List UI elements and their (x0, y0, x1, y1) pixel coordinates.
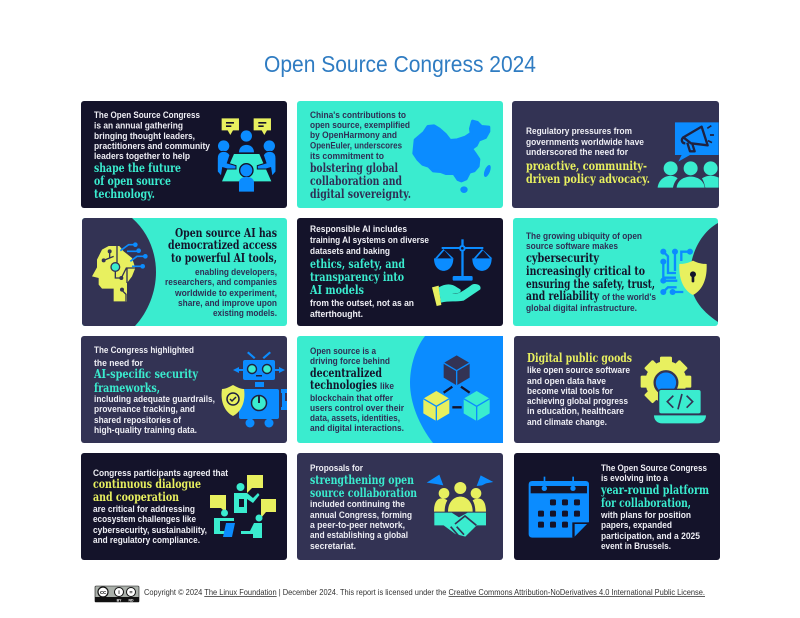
body text: data, assets, identities, (310, 413, 400, 424)
highlight heading: transparency into (310, 269, 404, 284)
highlight heading (93, 366, 199, 395)
highlight heading: continuous dialogue (93, 476, 201, 491)
body text (310, 499, 412, 552)
body text: papers, expanded (601, 520, 672, 531)
body text: become vital tools for (527, 386, 613, 397)
highlight heading: ethics, safety, and (310, 256, 405, 271)
body text (94, 394, 215, 436)
body text: and regulatory compliance. (93, 535, 200, 546)
body text: are critical for addressing (93, 504, 195, 515)
footer: license badge: = (129, 590, 133, 596)
highlight heading: ensuring the safety, trust, (526, 276, 655, 291)
curved dark panel (82, 218, 156, 326)
icon: people around a table (217, 118, 276, 192)
intro text: China's contributions to (310, 110, 406, 121)
body text: afterthought. (310, 309, 363, 320)
highlight heading: proactive, community- (526, 158, 647, 173)
body text: in education, healthcare (527, 406, 624, 417)
panel: cybersecurity (513, 218, 718, 326)
intro text: Responsible AI includes (310, 224, 407, 235)
panel: responsible AI (297, 218, 503, 326)
intro text: The Congress highlighted (94, 345, 194, 356)
body text (310, 381, 404, 434)
body text: like open source software (527, 365, 630, 376)
highlight heading: shape the future (94, 160, 181, 175)
footer: license badge: i (118, 590, 120, 596)
intro text: datasets and baking (310, 246, 390, 257)
panel: strengthening collaboration (297, 453, 503, 560)
heading: to powerful AI tools, (171, 250, 277, 265)
icon: calendar (529, 477, 589, 538)
intro text: governments worldwide have (526, 137, 644, 148)
body text: existing models. (213, 308, 277, 319)
panel: open source AI (82, 218, 287, 326)
body text: including adequate guardrails, (94, 394, 215, 405)
highlight heading: AI-specific security (93, 366, 199, 381)
intro text (526, 126, 644, 158)
body text: enabling developers, (195, 267, 277, 278)
icon: gear and laptop (641, 357, 706, 423)
footer: license badge: ND (128, 598, 134, 602)
highlight heading: of open source (94, 173, 171, 188)
panel: year-round platform (514, 453, 720, 560)
highlight heading (310, 365, 382, 392)
intro text: Open source is a (310, 346, 377, 357)
highlight heading: and reliability (526, 288, 600, 303)
heading: democratized access (168, 237, 277, 252)
body text: like (380, 381, 394, 392)
intro text: Congress participants agreed that (93, 468, 229, 479)
curved dark panel (690, 223, 718, 322)
intro text: bringing thought leaders, (94, 131, 195, 142)
highlight heading: digital sovereignty. (310, 186, 411, 201)
body text: high-quality training data. (94, 425, 197, 436)
body text: of the world's (602, 292, 656, 303)
body text: included continuing the (310, 499, 405, 510)
footer: license badge (95, 586, 139, 602)
highlight heading: and cooperation (93, 489, 179, 504)
intro text (310, 224, 429, 257)
highlight heading (93, 476, 201, 504)
intro text (310, 110, 410, 162)
highlight heading: decentralized (310, 365, 382, 380)
icon: circuit shield (660, 249, 707, 295)
body text: users control over their (310, 403, 404, 414)
body text: event in Brussels. (601, 541, 671, 552)
highlight heading: collaboration and (310, 173, 402, 188)
panel: AI-specific security (81, 336, 287, 443)
panel: dialogue and cooperation (81, 453, 287, 560)
body text: global digital infrastructure. (526, 303, 637, 314)
highlight heading (94, 160, 181, 201)
highlight heading (526, 158, 650, 186)
intro text: Proposals for (310, 463, 363, 474)
highlight heading: Digital public goods (527, 350, 632, 365)
highlight heading: technology. (94, 186, 155, 201)
body text: shared repositories of (94, 415, 182, 426)
highlight heading: driven policy advocacy. (526, 171, 650, 186)
intro text: The growing ubiquity of open (526, 231, 642, 242)
highlight heading: bolstering global (310, 160, 398, 175)
intro text: underscored the need for (526, 147, 628, 158)
body text: from the outset, not as an (310, 298, 414, 309)
highlight heading: increasingly critical to (526, 263, 645, 278)
intro text: The Open Source Congress (94, 110, 200, 121)
intro text: its commitment to (310, 151, 384, 162)
icon: megaphone and audience (658, 122, 719, 188)
icon: robot with shield (222, 352, 287, 428)
footer: license badge: BY (117, 598, 122, 602)
body text: a peer-to-peer network, (310, 520, 405, 531)
icon: AI head (92, 242, 148, 301)
highlight heading (309, 256, 405, 297)
icon: handshake with flags (427, 475, 493, 538)
intro text: open source, exemplified (310, 120, 410, 131)
panel: regulatory pressures (512, 101, 719, 208)
footer: license badge: cc (100, 590, 106, 596)
body text: with plans for position (600, 510, 691, 521)
icon: discussion group (210, 475, 276, 538)
body text: and digital interactions. (310, 423, 404, 434)
intro text (310, 346, 390, 367)
highlight heading: cybersecurity (526, 250, 600, 265)
icon: map of China (414, 121, 492, 193)
intro text: is evolving into a (601, 473, 669, 484)
intro text (526, 231, 642, 252)
body text: participation, and a 2025 (601, 531, 701, 542)
intro text: by OpenHarmony and (310, 130, 397, 141)
highlight heading: strengthening open (310, 472, 414, 487)
highlight heading (310, 472, 417, 500)
intro text: practitioners and community (94, 141, 211, 152)
intro text: driving force behind (310, 356, 390, 367)
body text (310, 298, 414, 320)
panel: about the congress (81, 101, 287, 208)
highlight heading: for collaboration, (601, 495, 691, 510)
intro text: OpenEuler, underscores (310, 140, 402, 152)
intro text: the need for (94, 358, 143, 369)
body text (527, 365, 630, 428)
intro text: The Open Source Congress (601, 463, 707, 474)
heading: Open source AI has (175, 225, 277, 240)
icon: scales and hand (432, 239, 492, 306)
intro text (601, 463, 707, 484)
title: Open Source Congress 2024 (264, 51, 536, 77)
body text: cybersecurity, sustainability, (93, 525, 207, 536)
body text: annual Congress, forming (310, 510, 412, 521)
curved blue panel (410, 336, 503, 443)
panel: decentralized technologies (297, 336, 503, 443)
body text (165, 267, 277, 319)
intro text: training AI systems on diverse (310, 235, 429, 246)
panel: China's contributions (297, 101, 503, 208)
body text (600, 510, 701, 552)
panel: digital public goods (514, 336, 720, 443)
body text: ecosystem challenges like (93, 514, 196, 525)
body text: and open data have (527, 376, 606, 387)
body text: blockchain that offer (310, 393, 393, 404)
intro text: source software makes (526, 241, 618, 252)
highlight heading: AI models (309, 282, 364, 297)
heading (168, 225, 277, 265)
highlight heading: source collaboration (310, 485, 417, 500)
body text: secretariat. (310, 541, 356, 552)
intro text: is an annual gathering (94, 120, 183, 132)
highlight heading: frameworks, (94, 380, 160, 395)
body text: provenance tracking, and (94, 404, 195, 415)
body text (526, 292, 656, 314)
footer: copyright text: Copyright © 2024 The Linux Foundation | December 2024. This report is licensed under the Creative Commons Attribution-NoDerivatives 4.0 International Public License. (144, 588, 705, 597)
highlight heading: year-round platform (600, 482, 709, 497)
body text (93, 504, 207, 546)
icon: connected cubes (423, 355, 490, 421)
body text: and climate change. (527, 417, 607, 428)
body text: achieving global progress (527, 396, 628, 407)
highlight heading (310, 160, 411, 201)
body text: and establishing a global (310, 530, 408, 541)
highlight heading (600, 482, 709, 510)
body text: share, and improve upon (178, 298, 277, 309)
body text: researchers, and companies (165, 277, 277, 288)
intro text: leaders together to help (94, 151, 190, 162)
body text: worldwide to experiment, (174, 288, 277, 299)
intro text (94, 110, 211, 162)
intro text: Regulatory pressures from (526, 126, 632, 137)
highlight heading (526, 250, 655, 303)
highlight heading: technologies (310, 377, 377, 392)
intro text (94, 345, 194, 369)
